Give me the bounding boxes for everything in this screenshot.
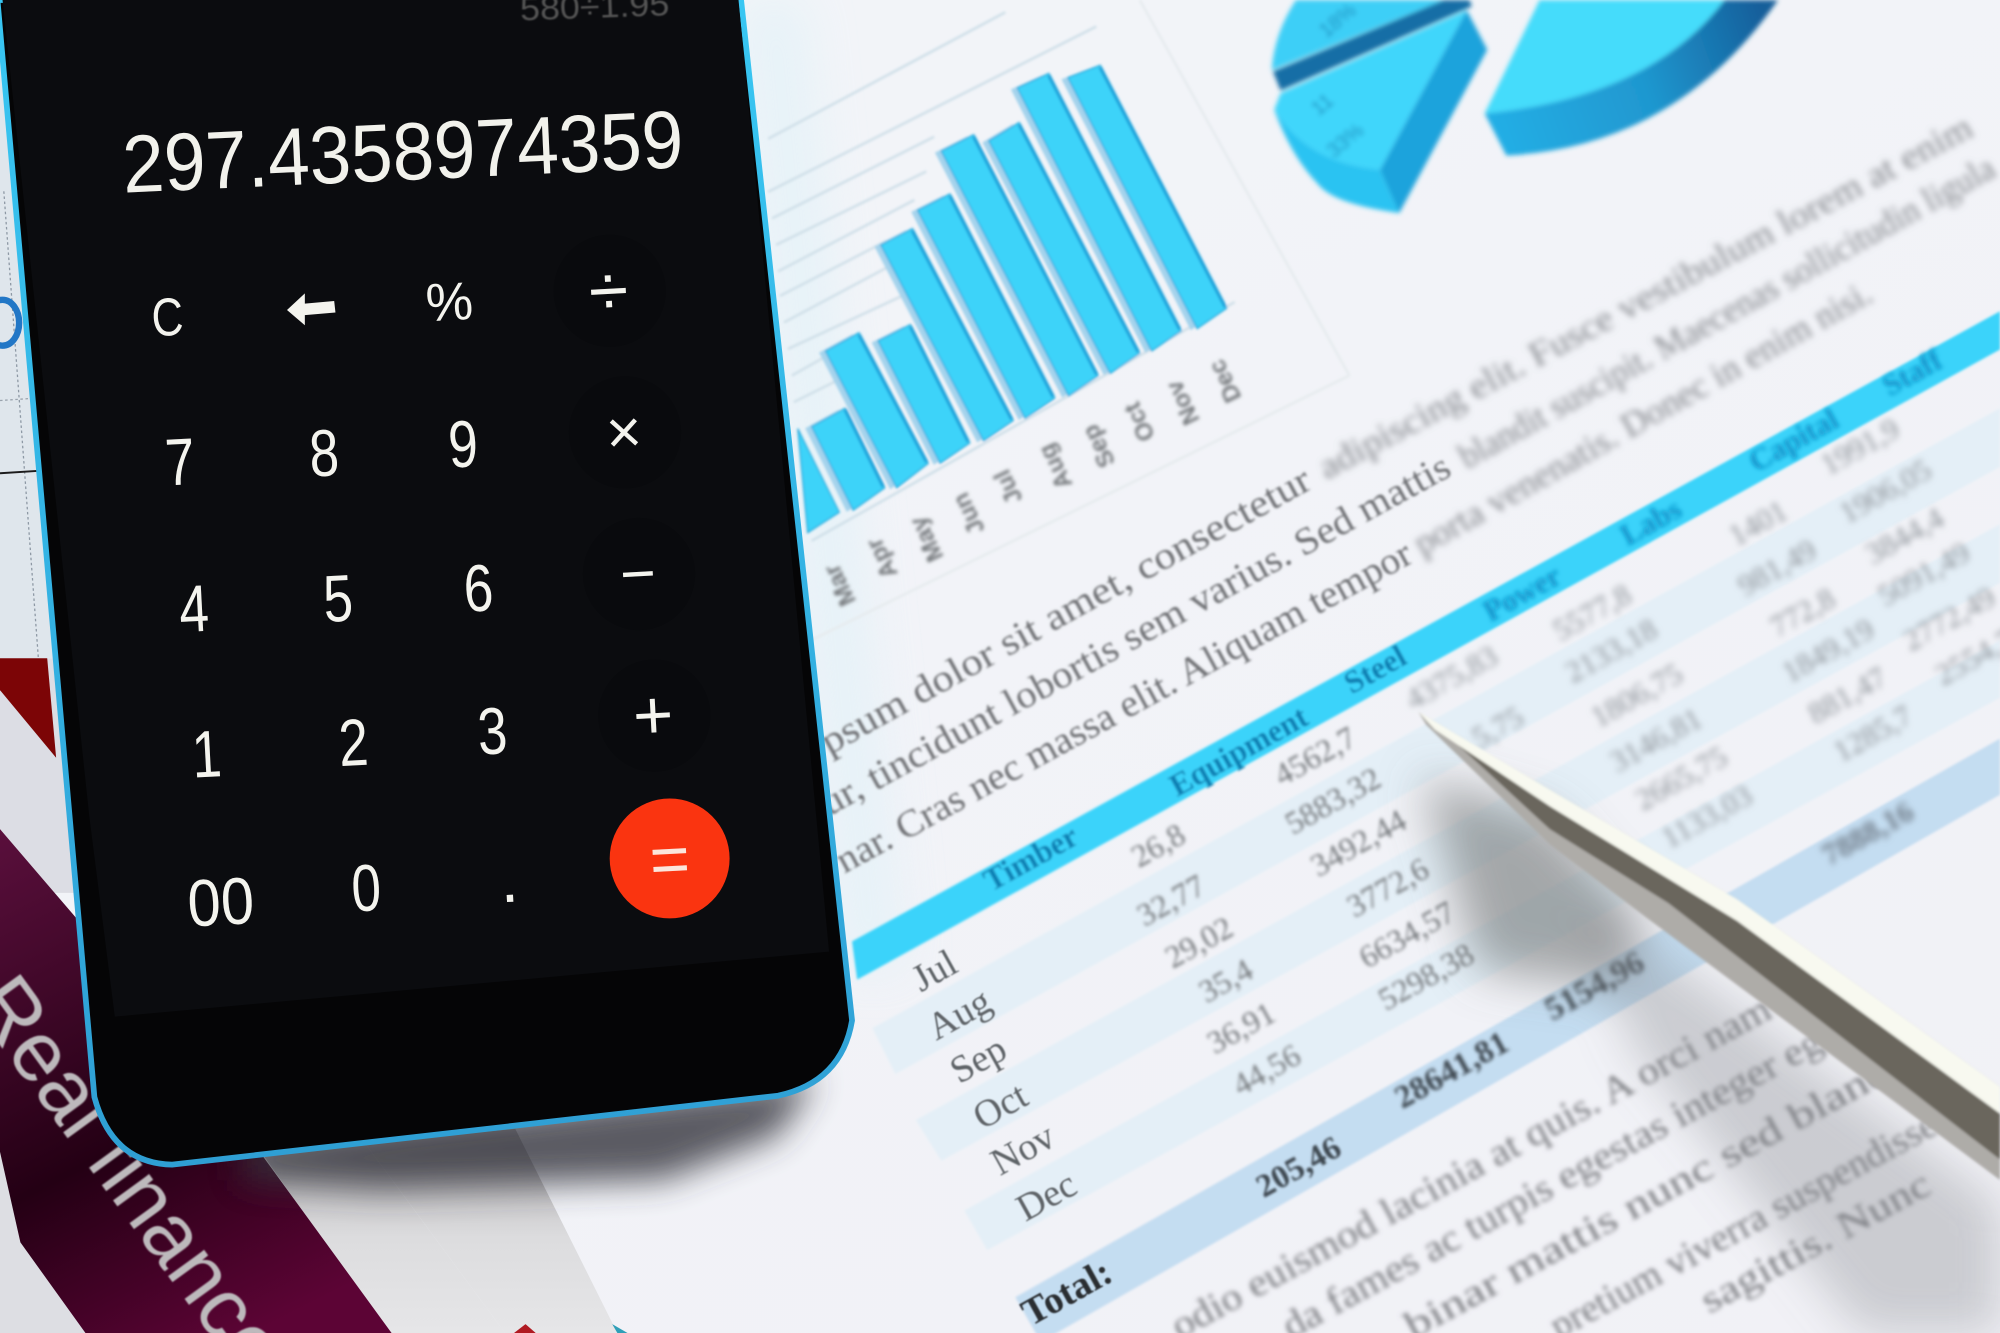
table row stripes	[872, 408, 2000, 1250]
timber and equipment values: 32,77	[1131, 868, 1211, 933]
total row values: 28641,81	[1388, 1024, 1515, 1116]
phone screen	[3, 0, 829, 1017]
table month labels: Oct	[966, 1074, 1035, 1138]
total row values: 7888,16	[1816, 794, 1919, 872]
far table values: 1133,03	[1656, 778, 1758, 855]
far table values: 1849,19	[1776, 612, 1880, 690]
total row band	[1015, 739, 2000, 1333]
far table header labels	[1477, 342, 1949, 628]
far table header labels: Capital	[1743, 402, 1844, 479]
far table values: 981,49	[1732, 533, 1822, 603]
total row values	[1250, 794, 1919, 1205]
far table values: 4375,83	[1400, 639, 1504, 717]
left slice upper	[1272, 0, 1444, 70]
small teal mark	[612, 1324, 628, 1333]
chart month labels: May	[904, 511, 949, 566]
keypad operators: ×	[604, 397, 644, 467]
phone	[0, 0, 852, 1165]
keypad operators	[604, 397, 675, 755]
pie labels: 18%	[1315, 0, 1361, 42]
far table values: 5,75	[1466, 699, 1529, 755]
timber and equipment values	[1125, 720, 1480, 1103]
keypad digits: 6	[462, 551, 495, 626]
chart month labels: Mar	[818, 559, 862, 610]
operator key backdrops	[554, 235, 710, 772]
chart month labels: Sep	[1077, 420, 1121, 472]
equals button: =	[648, 820, 692, 899]
left slice rim	[1274, 110, 1399, 213]
pie labels	[1307, 0, 1368, 162]
phone shadow	[242, 1078, 816, 1189]
paragraph above the table: ur, tincidunt lobortis sem varius. Sed mattis	[813, 446, 1458, 824]
pen lower barrel	[1418, 712, 2000, 1180]
keypad digits: 7	[163, 424, 197, 500]
chart month labels: Nov	[1161, 376, 1205, 429]
left paper strip with chart fragments	[0, 0, 77, 658]
left slice side	[1380, 10, 1487, 213]
timber and equipment values: 5883,32	[1279, 760, 1387, 841]
keypad function row: C	[150, 288, 185, 348]
pie labels: 33%	[1323, 119, 1368, 162]
maroon brochure band with title	[0, 829, 392, 1333]
pen shadow	[1422, 778, 2000, 1333]
keypad digits: 4	[177, 571, 211, 647]
far table values: 2133,18	[1559, 612, 1663, 690]
icon: backspace arrow	[287, 293, 335, 325]
table month labels: Sep	[943, 1028, 1014, 1092]
far table values: 3844,4	[1860, 501, 1950, 571]
chart month labels: Jun	[947, 488, 991, 539]
far table values: 1991,9	[1815, 411, 1905, 482]
paragraph above the table: psum dolor sit amet, consectetur	[813, 459, 1318, 763]
keypad function row: ÷	[587, 250, 630, 332]
chart month labels	[818, 355, 1247, 610]
table month labels: Nov	[984, 1115, 1063, 1184]
far table values: 881,47	[1802, 660, 1892, 731]
far table header labels: Labs	[1614, 491, 1687, 552]
far table header labels: Power	[1477, 558, 1567, 628]
far table values: 772,8	[1764, 581, 1841, 644]
equals button	[610, 799, 730, 918]
paragraph above the table: porta venenatis. Donec in enim nisi.	[1406, 272, 1879, 563]
keypad operators: −	[618, 539, 658, 608]
total row values: 205,46	[1250, 1129, 1347, 1205]
phone body	[0, 0, 852, 1165]
left slice face	[1274, 10, 1467, 170]
far table values: 1285,7	[1828, 698, 1918, 769]
timber and equipment values: 29,02	[1159, 910, 1239, 975]
dark band on pie	[1273, 0, 1472, 91]
keypad digits: 5	[321, 561, 355, 636]
paragraph above the table: nar. Cras nec massa elit. Aliquam tempor	[829, 532, 1420, 882]
chart month labels: Jul	[989, 465, 1028, 508]
keypad digits: 1	[190, 717, 223, 792]
keypad digits: 8	[307, 415, 341, 491]
keypad operators: +	[631, 676, 675, 755]
far table values: 2665,75	[1630, 739, 1733, 817]
total row values: 5154,96	[1538, 943, 1650, 1028]
folded sheet left of the report	[263, 1143, 505, 1333]
right slice side	[1485, 0, 1778, 156]
table month labels	[905, 942, 1084, 1230]
table month labels: Jul	[905, 942, 964, 1000]
paragraph above the table	[813, 106, 2000, 882]
paragraph above the table: adipiscing elit. Fusce vestibulum lorem at enim	[1312, 106, 1979, 487]
folded sheet middle	[365, 1129, 617, 1333]
pie labels: 11	[1307, 90, 1338, 120]
keypad digits: 3	[476, 694, 509, 769]
bottom left corner paper	[0, 1123, 102, 1333]
chart month labels: Oct	[1119, 398, 1161, 446]
pen dark barrel stripe	[1439, 727, 2000, 1160]
table header band: Equipment	[1163, 699, 1314, 803]
timber and equipment values: 3492,44	[1305, 802, 1412, 883]
table header band	[852, 311, 2000, 980]
pen	[1418, 712, 2000, 1180]
table header band: Timber	[977, 818, 1084, 898]
chart month labels: Apr	[861, 533, 904, 583]
bars	[798, 65, 1227, 533]
paragraph below the table: sagittis. Nunc	[1693, 1163, 1938, 1322]
keypad digits: 2	[337, 705, 370, 780]
timber and equipment values: 26,8	[1125, 817, 1191, 874]
chart month labels: Aug	[1033, 439, 1078, 493]
keypad digits: 9	[446, 407, 480, 482]
table total label: Total:	[1015, 1251, 1119, 1333]
timber and equipment values: 5298,38	[1372, 936, 1480, 1017]
timber and equipment values: 6634,57	[1353, 894, 1461, 975]
timber and equipment values: 4562,7	[1268, 720, 1362, 793]
red paper corner	[0, 658, 56, 758]
timber and equipment values: 36,91	[1201, 995, 1281, 1061]
far table values: 3146,81	[1604, 701, 1708, 779]
bar chart panel	[768, 0, 1349, 640]
bar shadows	[805, 67, 1220, 512]
far table values: 1806,75	[1585, 656, 1688, 734]
keypad digits: 00	[186, 864, 256, 941]
far table values: 5091,49	[1872, 535, 1975, 613]
far table values: 1906,05	[1834, 452, 1937, 530]
table month labels: Dec	[1010, 1163, 1084, 1230]
lower left paper under the phone	[0, 658, 115, 893]
keypad function row	[150, 250, 630, 348]
paragraph below the table	[1164, 988, 1944, 1333]
far table values: 5577,8	[1547, 577, 1637, 648]
table header band: Steel	[1338, 638, 1412, 701]
timber and equipment values: 3772,6	[1341, 851, 1435, 924]
right slice face	[1485, 0, 1724, 114]
blue reflection near phone	[740, 0, 906, 969]
far table values: 2772,49	[1897, 580, 2000, 658]
bar right edges	[845, 67, 1225, 487]
keypad digits: .	[498, 842, 520, 917]
keypad digits	[163, 407, 520, 941]
keypad function row: %	[424, 272, 474, 333]
main display number: 297.4358974359	[120, 94, 685, 211]
small red mark	[514, 1324, 536, 1333]
timber and equipment values: 35,4	[1193, 952, 1259, 1010]
table month labels: Aug	[920, 980, 998, 1049]
keypad digits: 0	[349, 850, 383, 926]
chart month labels: Dec	[1204, 355, 1247, 407]
pen highlight	[1418, 712, 2000, 1114]
far table values: 1401	[1723, 493, 1793, 553]
pie chart	[1272, 0, 1778, 213]
far table values	[1400, 411, 2000, 855]
timber and equipment values: 44,56	[1227, 1037, 1306, 1103]
far table header labels: Staff	[1876, 342, 1949, 403]
